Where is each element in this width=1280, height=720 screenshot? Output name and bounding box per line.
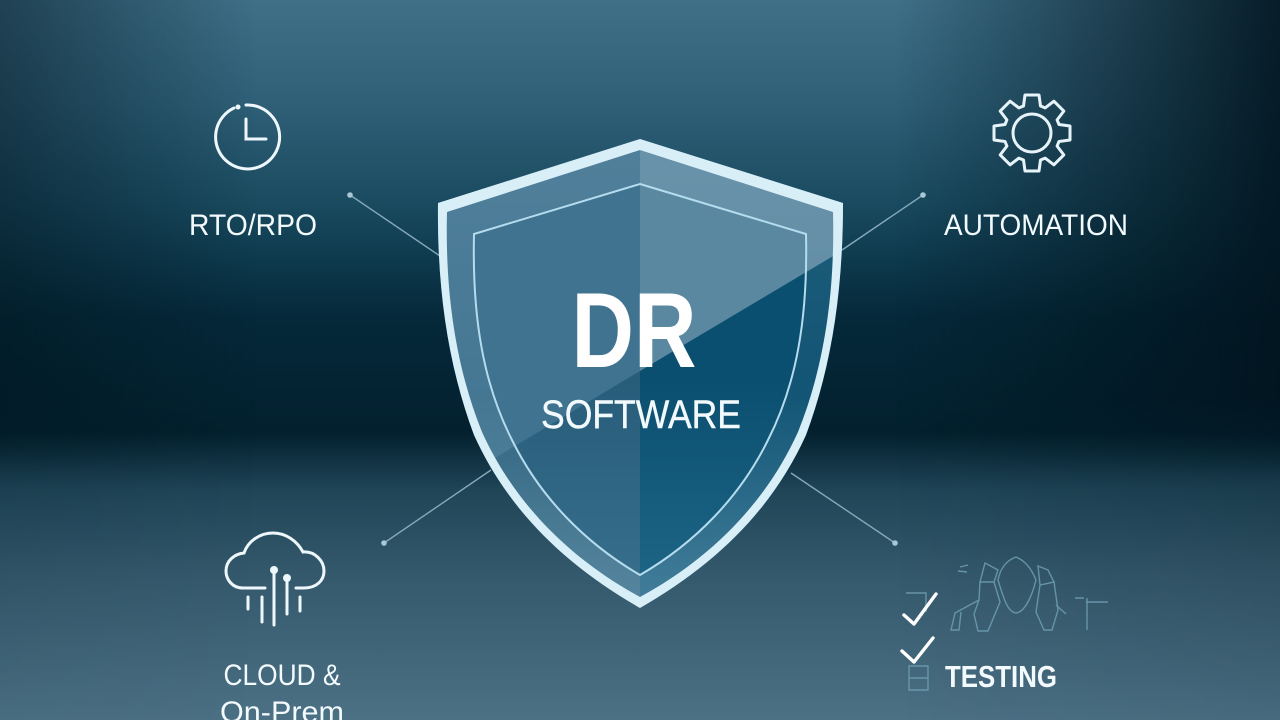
check marks — [902, 594, 936, 662]
central shield — [430, 130, 850, 620]
connector lines — [347, 192, 926, 546]
shield subtitle SOFTWARE: SOFTWARE — [541, 393, 741, 437]
icon: testing checklist — [902, 557, 1108, 690]
shield outer outline — [438, 139, 843, 608]
icon: gear — [994, 95, 1070, 171]
shield facets — [430, 130, 850, 620]
icon: cloud — [226, 533, 324, 625]
shield title DR: DR — [572, 270, 696, 390]
faint wireframe figure — [906, 557, 1108, 690]
label: RTO/RPO: RTO/RPO — [189, 209, 317, 242]
label: AUTOMATION: AUTOMATION — [944, 209, 1128, 242]
shield inner outline — [474, 184, 806, 575]
icon: clock — [216, 104, 280, 169]
label: CLOUD & On-Prem: CLOUD & — [224, 659, 340, 692]
label: CLOUD & On-Prem — [220, 659, 344, 720]
label: TESTING: TESTING — [945, 659, 1057, 694]
